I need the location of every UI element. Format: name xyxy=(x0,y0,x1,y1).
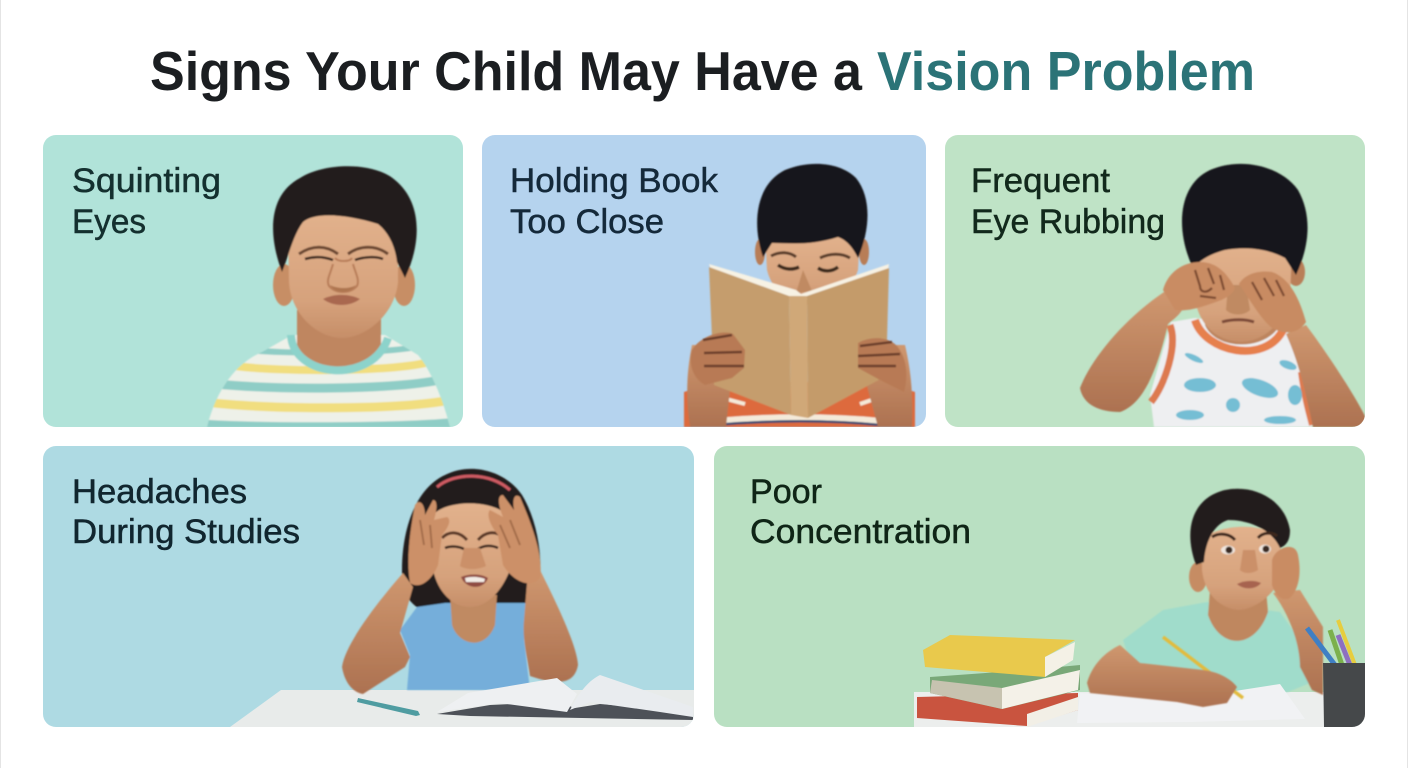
heading: headaches during studies: During Studies xyxy=(72,513,300,551)
table xyxy=(230,690,694,727)
illustration: boy rubbing eyes xyxy=(1080,164,1367,427)
heading: holding book too close: Too Close xyxy=(510,203,664,241)
heading: frequent eye rubbing: Eye Rubbing xyxy=(971,203,1165,241)
heading: squinting eyes: Squinting xyxy=(72,162,221,200)
open book xyxy=(437,675,693,720)
heading: holding book too close: Holding Book xyxy=(510,162,719,200)
table xyxy=(914,692,1365,727)
panel: poor concentration xyxy=(714,446,1365,727)
heading: headaches during studies: Headaches xyxy=(72,473,247,511)
illustration: boy with book xyxy=(684,164,915,427)
illustration: distracted boy xyxy=(1123,489,1323,695)
panel: squinting eyes xyxy=(43,135,463,427)
heading: frequent eye rubbing: Frequent xyxy=(971,162,1111,200)
panel background xyxy=(43,446,694,727)
panel background xyxy=(714,446,1365,727)
title: Vision Problem xyxy=(877,40,1255,102)
illustration: squinting boy xyxy=(200,166,460,427)
pencil holder xyxy=(1307,620,1365,727)
shirt print xyxy=(1176,351,1302,424)
panel background xyxy=(482,135,926,427)
heading: poor concentration: Concentration xyxy=(750,513,971,551)
panel: holding book too close xyxy=(482,135,926,427)
pencil xyxy=(357,698,420,716)
illustration: girl with headache xyxy=(342,469,578,694)
panel: frequent eye rubbing xyxy=(945,135,1367,427)
heading: poor concentration: Poor xyxy=(750,473,822,511)
panel: headaches during studies xyxy=(43,446,694,727)
panel background xyxy=(945,135,1365,427)
book stack xyxy=(917,635,1080,727)
panel background xyxy=(43,135,463,427)
title xyxy=(150,40,1255,102)
heading: squinting eyes: Eyes xyxy=(72,203,146,241)
title: Signs Your Child May Have a xyxy=(150,40,862,102)
arm and hand with pencil xyxy=(1087,637,1243,707)
notebook xyxy=(1236,684,1286,693)
